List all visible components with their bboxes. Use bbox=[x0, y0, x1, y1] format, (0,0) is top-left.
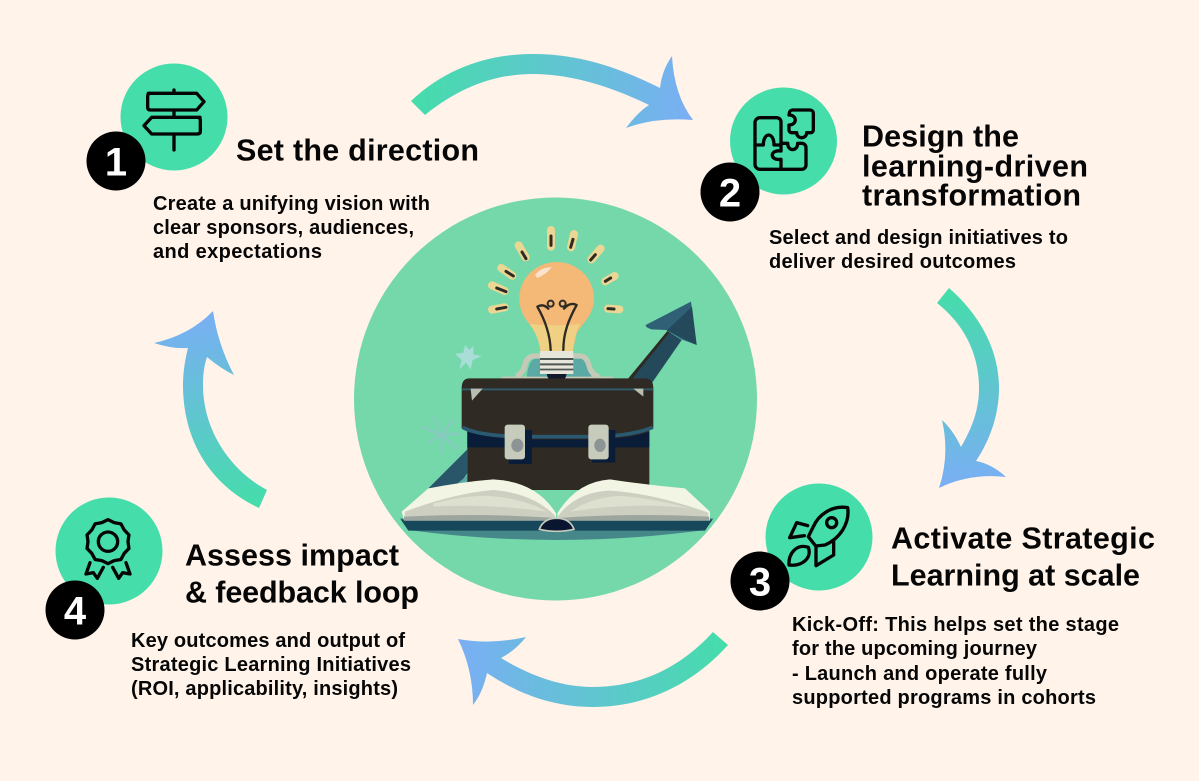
description 1 bbox=[153, 193, 430, 263]
description 4 bbox=[131, 630, 411, 700]
icon: briefcase handle bbox=[502, 356, 613, 381]
description 3: for the upcoming journey bbox=[792, 638, 1038, 660]
description 1: and expectations bbox=[153, 241, 322, 263]
icon: signpost bbox=[144, 90, 204, 150]
number badge 4: 4 bbox=[64, 590, 87, 634]
icon: sparkles bbox=[423, 345, 482, 453]
number badge 2: 2 bbox=[719, 172, 741, 216]
number badge 1 bbox=[86, 132, 146, 190]
heading 4 bbox=[185, 538, 419, 610]
description 1: clear sponsors, audiences, bbox=[153, 217, 414, 239]
heading 2: learning-driven bbox=[862, 150, 1088, 184]
description 1: Create a unifying vision with bbox=[153, 193, 430, 215]
heading 4: & feedback loop bbox=[185, 576, 419, 610]
icon: award rosette bbox=[86, 520, 130, 578]
step 1: set the direction bbox=[86, 64, 479, 263]
central illustration bbox=[354, 198, 757, 600]
icon circle 1 bbox=[120, 64, 228, 170]
illustration: briefcase, bulb and book bbox=[400, 230, 713, 540]
description 2: deliver desired outcomes bbox=[769, 251, 1016, 273]
arrow: step 4 to step 1 bbox=[154, 311, 267, 508]
icon: light rays bbox=[492, 230, 619, 310]
description 3: supported programs in cohorts bbox=[792, 687, 1096, 709]
description 2: Select and design initiatives to bbox=[769, 227, 1068, 249]
step 3: activate at scale bbox=[730, 484, 1155, 709]
icon circle 2 bbox=[730, 88, 837, 194]
step 4: assess impact bbox=[46, 498, 419, 700]
description 4: Key outcomes and output of bbox=[131, 630, 405, 652]
number badge 4 bbox=[46, 580, 104, 640]
arrow: step 1 to step 2 bbox=[411, 54, 693, 128]
arrow: step 3 to step 4 bbox=[458, 632, 728, 707]
description 3 bbox=[792, 614, 1119, 709]
icon: briefcase bbox=[462, 378, 653, 490]
icon: puzzle bbox=[755, 110, 813, 169]
heading 2 bbox=[862, 120, 1088, 212]
heading 3: Activate Strategic bbox=[891, 522, 1155, 556]
icon: rocket bbox=[789, 507, 848, 566]
heading 3: Learning at scale bbox=[891, 558, 1140, 592]
heading 3 bbox=[891, 522, 1155, 592]
description 4: (ROI, applicability, insights) bbox=[131, 678, 398, 700]
number badge 3: 3 bbox=[749, 560, 771, 604]
icon circle 4 bbox=[56, 498, 162, 604]
heading 2: Design the bbox=[862, 120, 1019, 154]
description 4: Strategic Learning Initiatives bbox=[131, 654, 411, 676]
heading 2: transformation bbox=[862, 178, 1081, 212]
icon: light bulb bbox=[519, 262, 594, 383]
heading 1: Set the direction bbox=[236, 134, 479, 168]
arrow: step 2 to step 3 bbox=[937, 288, 1006, 488]
number badge 2 bbox=[700, 162, 760, 222]
icon: open book bbox=[400, 479, 713, 540]
step 2: design the transformation bbox=[700, 88, 1088, 273]
icon: growth arrow bbox=[428, 302, 697, 488]
icon circle 3 bbox=[766, 484, 872, 590]
number badge 3 bbox=[730, 552, 790, 610]
description 3: Kick-Off: This helps set the stage bbox=[792, 614, 1119, 636]
green circle backdrop bbox=[354, 198, 757, 600]
number badge 1: 1 bbox=[105, 140, 127, 184]
heading 4: Assess impact bbox=[185, 538, 399, 572]
description 2 bbox=[769, 227, 1068, 273]
description 3: - Launch and operate fully bbox=[792, 663, 1048, 685]
